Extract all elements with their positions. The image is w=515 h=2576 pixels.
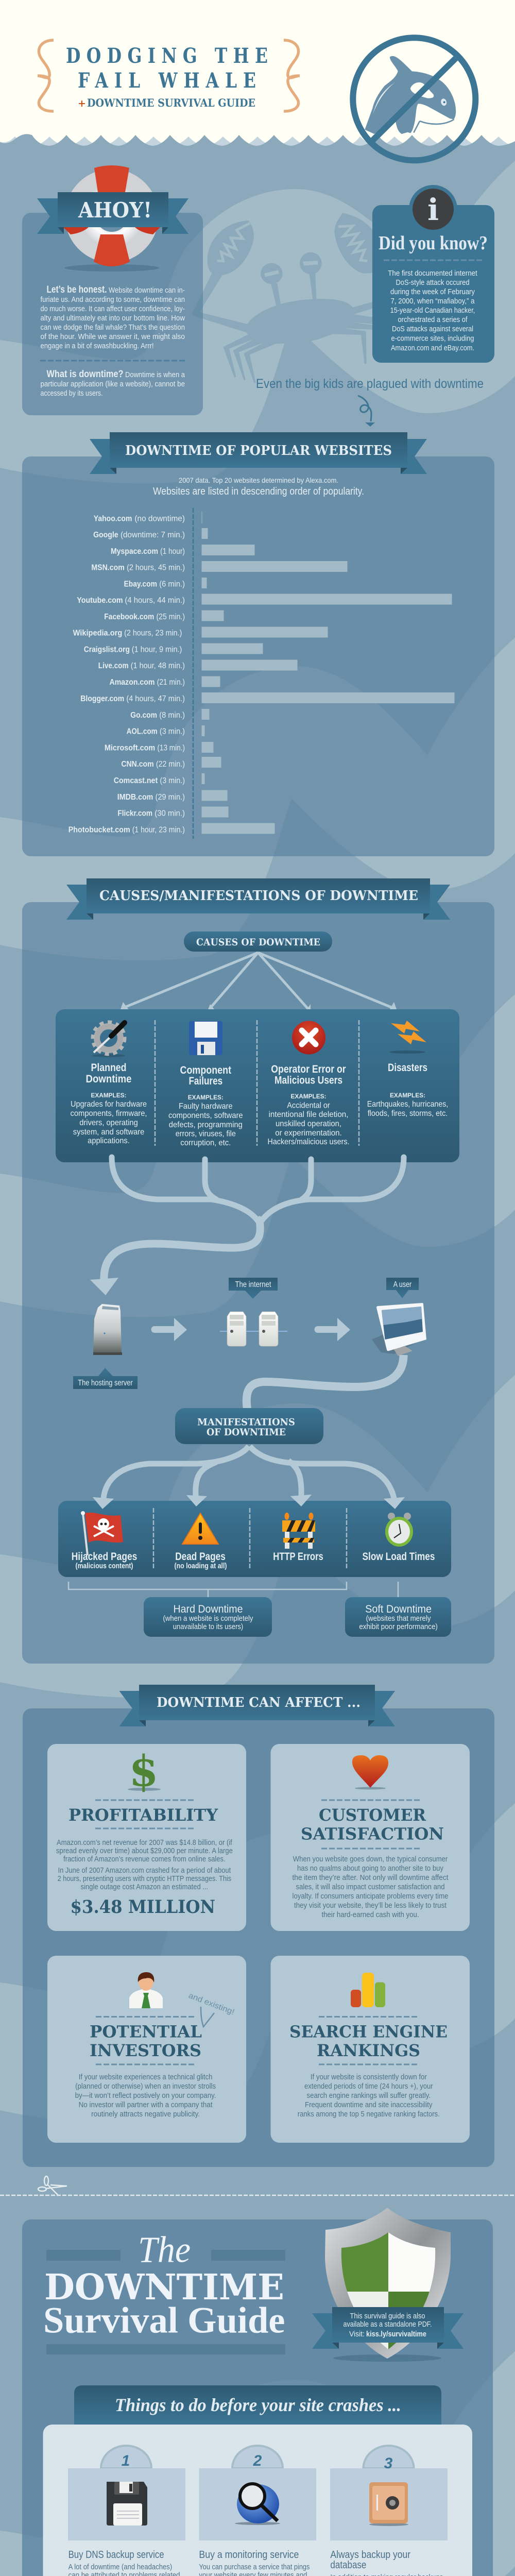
row: amazon: Amazon.com <box>109 678 154 687</box>
text: rankings: ranks among the top 5 negative ranking factors. <box>298 2110 440 2119</box>
icon: lightning <box>389 1021 426 1054</box>
box: hard downtime <box>144 1597 272 1637</box>
row: cnn: CNN.com <box>121 760 154 769</box>
row: amazon <box>109 676 220 687</box>
column: disasters: Earthquakes, hurricanes, <box>367 1100 448 1109</box>
column: planned downtime: Planned <box>91 1062 127 1074</box>
row: yahoo <box>94 512 202 523</box>
text: investors: No investor will partner with a company that <box>79 2100 213 2109</box>
row: live: (1 hour, 48 min.) <box>131 662 185 670</box>
column: planned downtime: Downtime <box>85 1073 132 1085</box>
icon: monitor <box>372 1303 426 1356</box>
text: dos attack fact: during the week of February <box>390 287 475 296</box>
text: let's be honest: Website downtime can in- <box>109 286 185 295</box>
arrow: internet to user <box>314 1318 350 1341</box>
column: operator error: Operator Error or <box>271 1063 346 1075</box>
text: let's be honest: can we dodge the fail whale? That’s the question <box>40 323 185 332</box>
text: dos attack fact: DoS-style attack occured <box>396 278 470 287</box>
text: dos attack fact: DoS attacks against several <box>392 325 473 333</box>
heading: customer satisfaction: CUSTOMER <box>319 1805 426 1825</box>
step 2: buy monitoring: 2 <box>253 2452 262 2469</box>
panel: did you know <box>372 185 494 363</box>
icon: dollar: $ <box>129 1747 159 1796</box>
text: amazon outage: 2 hours, presenting users with cryptic HTTP messages. This <box>58 1874 231 1883</box>
wave scallops <box>0 134 515 147</box>
step 3: always backup: database <box>330 2560 366 2571</box>
box: soft downtime: exhibit poor performance) <box>359 1622 438 1631</box>
panel: four manifestations <box>58 1495 451 1577</box>
text: what is downtime: What is downtime? <box>46 369 124 380</box>
text: let's be honest: of the hour. While we answer it, we might also <box>40 332 185 341</box>
row: youtube <box>77 594 452 605</box>
text: let's be honest: Let’s be honest. <box>46 284 107 295</box>
ribbon: ahoy <box>37 192 188 234</box>
box: soft downtime: Soft Downtime <box>365 1603 432 1615</box>
step 1: buy dns backup: A lot of downtime (and headaches) <box>68 2563 172 2571</box>
text: dos attack fact: orchestrated a series of <box>398 315 468 324</box>
column: planned downtime: system, and software <box>73 1128 144 1137</box>
text: let's be honest: alty and ultimately eat into our bottom line. How <box>40 314 185 323</box>
column: component failures: Faulty hardware <box>179 1102 233 1111</box>
column: planned downtime: applications. <box>88 1137 130 1145</box>
icon: blue floppy <box>189 1021 222 1055</box>
row: photobucket: (1 hour, 23 min.) <box>132 825 185 835</box>
icon: investor <box>129 1972 163 2008</box>
row: comcast: Comcast.net <box>114 776 158 785</box>
row: msn: (2 hours, 45 min.) <box>127 564 185 572</box>
heading: Did you know? <box>379 232 488 254</box>
row: facebook <box>104 610 224 621</box>
text: what is downtime: Downtime is when a <box>125 370 185 379</box>
row: yahoo: (no downtime) <box>134 514 185 523</box>
column: operator error: or experimentation. <box>275 1129 342 1138</box>
callout: big kids: Even the big kids are plagued with downtime <box>256 377 484 391</box>
text: rankings: If your website is consistently down for <box>311 2073 427 2081</box>
column: operator error: unskilled operation, <box>276 1120 341 1128</box>
icon: bars <box>351 1973 385 2007</box>
pill: manifestations of downtime: MANIFESTATIONS <box>197 1417 295 1428</box>
row: myspace: Myspace.com <box>111 547 158 556</box>
row: google: Google <box>93 531 118 539</box>
card: search engine rankings <box>271 1956 470 2143</box>
column: component failures: EXAMPLES: <box>188 1094 224 1101</box>
row: wikipedia <box>73 626 328 638</box>
heading: customer satisfaction <box>301 1805 444 1843</box>
step 2: buy monitoring: You can purchase a service that pings <box>199 2563 310 2571</box>
icon: internet servers <box>220 1312 287 1346</box>
subtitle: + <box>78 98 86 109</box>
text: consumers: loyalty. If consumers anticipate problems every time <box>293 1892 448 1901</box>
icon: scissors <box>38 2176 67 2195</box>
label: hijacked pages: Hijacked Pages <box>72 1551 137 1563</box>
label: a user <box>386 1278 419 1298</box>
row: go <box>130 709 209 720</box>
step 3: always backup: 3 <box>384 2455 393 2472</box>
pill: manifestations of downtime <box>175 1408 323 1444</box>
panel: downtime can affect <box>23 1708 494 2167</box>
text: what is downtime: accessed by its users. <box>40 389 103 398</box>
column: operator error: Malicious Users <box>274 1075 342 1086</box>
ribbon: pdf note: kiss.ly/survivaltime <box>366 2330 426 2338</box>
row: comcast <box>114 773 205 785</box>
box: soft downtime: (websites that merely <box>366 1614 431 1623</box>
text: dos attack fact: Amazon.com and eBay.com. <box>391 344 474 352</box>
column: planned downtime: Upgrades for hardware <box>71 1100 147 1109</box>
column: operator error: Accidental or <box>287 1101 330 1110</box>
panel: survival guide <box>22 2219 493 2576</box>
text: investors: routinely attracts negative publicity. <box>91 2110 200 2119</box>
column: planned downtime <box>70 1062 147 1145</box>
row: cnn <box>121 757 221 769</box>
label: the internet <box>229 1278 278 1299</box>
text: let's be honest <box>40 284 185 350</box>
row: craigslist <box>84 643 263 654</box>
row: cnn: (22 min.) <box>156 760 185 769</box>
text: rankings: extended periods of time (24 hours +), your <box>304 2082 433 2091</box>
title <box>38 40 300 111</box>
column: operator error <box>268 1063 349 1146</box>
column: disasters: floods, fires, storms, etc. <box>368 1109 448 1118</box>
page header background <box>0 0 515 155</box>
text: let's be honest: engage in a bit of swashbuckling. Arrr! <box>40 342 153 350</box>
box: hard downtime: Hard Downtime <box>173 1603 243 1615</box>
bar chart: downtime by website <box>68 508 454 839</box>
row: flickr: (30 min.) <box>154 809 185 818</box>
icon: hosting server tower <box>93 1304 122 1355</box>
row: wikipedia: (2 hours, 23 min.) <box>124 629 182 638</box>
title line one: DODGING THE <box>66 44 268 68</box>
row: wikipedia: Wikipedia.org <box>73 629 122 638</box>
column: disasters: EXAMPLES: <box>390 1092 425 1099</box>
text: dos attack fact: 7, 2000, when “mafiaboy,” a <box>390 297 475 306</box>
text: amazon outage: Amazon.com’s net revenue for 2007 was $14.8 billion, or (if <box>57 1838 232 1847</box>
panel: downtime of popular websites <box>22 456 494 856</box>
note: and existing <box>187 1991 235 2027</box>
icon: pirate flag <box>81 1511 123 1555</box>
step 1: buy dns backup: Buy DNS backup service <box>68 2549 164 2561</box>
stat: cost: $3.48 MILLION <box>70 1896 215 1918</box>
note: and existing: and existing! <box>187 1991 235 2016</box>
title: the downtime survival guide: Survival Guide <box>43 2300 285 2341</box>
row: aol: AOL.com <box>127 727 158 736</box>
text: what is downtime: particular application (like a website), cannot be <box>40 380 185 388</box>
label: http errors: HTTP Errors <box>273 1551 323 1563</box>
row: aol <box>127 725 205 736</box>
whale <box>365 56 456 134</box>
row: microsoft <box>105 742 213 753</box>
row: blogger: Blogger.com <box>80 694 124 703</box>
icon: magnifier on globe <box>235 2484 280 2525</box>
step 2: buy monitoring <box>199 2446 316 2576</box>
right brace <box>284 40 300 111</box>
text: consumers: When you website goes down, the typical consumer <box>293 1855 448 1863</box>
banner: downtime can affect <box>119 1685 395 1726</box>
text: what is downtime <box>40 369 185 398</box>
box: hard downtime: unavailable to its users) <box>173 1622 243 1631</box>
subtitle: DOWNTIME SURVIVAL GUIDE <box>87 96 255 109</box>
step 3: always backup: Always backup your <box>330 2549 410 2561</box>
text: dos attack fact <box>388 269 477 352</box>
pill: manifestations of downtime: OF DOWNTIME <box>207 1427 286 1438</box>
banner: downtime can affect: DOWNTIME CAN AFFECT ... <box>157 1695 360 1710</box>
label: slow load times: Slow Load Times <box>363 1551 435 1563</box>
label: the internet: The internet <box>235 1280 271 1289</box>
row: microsoft: (13 min.) <box>157 744 185 752</box>
heading: potential investors: INVESTORS <box>90 2041 201 2060</box>
text: dos attack fact: e-commerce sites, including <box>391 334 474 343</box>
row: flickr: Flickr.com <box>117 809 152 818</box>
row: imdb: (29 min.) <box>156 793 185 802</box>
title line two: FAIL WHALE <box>78 69 256 93</box>
label: hijacked pages <box>72 1551 137 1570</box>
text: rankings: Frequent downtime and site inaccessibility <box>305 2100 433 2109</box>
text: rankings: search engine rankings will suffer greatly. <box>307 2091 431 2100</box>
text: dos attack fact: The first documented internet <box>388 269 477 278</box>
step 1: buy dns backup: 1 <box>122 2452 130 2469</box>
ribbon: pdf note: available as a standalone PDF. <box>343 2320 432 2329</box>
row: blogger <box>80 692 455 703</box>
text: amazon outage: spread evenly over time) about $29,000 per minute. A large <box>56 1846 233 1855</box>
icon: lifebuoy <box>63 165 160 272</box>
text: amazon outage: fraction of Amazon’s revenue comes from online sales. <box>63 1855 226 1863</box>
row: photobucket <box>68 823 274 835</box>
panel: ahoy <box>22 165 203 415</box>
bracket: hard and soft downtime <box>68 1582 398 1597</box>
row: craigslist: Craigslist.org <box>84 645 130 654</box>
row: msn <box>91 561 347 572</box>
arrows: causes to categories <box>119 953 398 1014</box>
icon: info <box>413 189 454 230</box>
left brace <box>38 40 54 111</box>
text: investors: (planned or otherwise) when an investor strolls <box>75 2082 216 2091</box>
row: google <box>93 528 208 539</box>
text: investors: If your website experiences a technical glitch <box>79 2073 212 2081</box>
label: hosting server: The hosting server <box>78 1379 133 1387</box>
row: live: Live.com <box>98 662 129 670</box>
pill: causes of downtime <box>184 931 332 952</box>
row: youtube: Youtube.com <box>77 596 123 605</box>
row: ebay: Ebay.com <box>124 580 157 588</box>
text: consumers: the item they’re after. Not only will downtime affect <box>293 1873 449 1882</box>
column: component failures: errors, viruses, file <box>176 1129 236 1139</box>
text: amazon outage <box>56 1838 233 1891</box>
ribbon: pdf note <box>312 2307 464 2349</box>
text: consumers: their hard-earned cash with you. <box>321 1910 419 1919</box>
step 1: buy dns backup <box>68 2446 185 2576</box>
text: amazon outage: In June of 2007 Amazon.com crashed for a period of about <box>58 1866 231 1875</box>
chart note: Websites are listed in descending order of popularity. <box>153 486 364 497</box>
column: component failures <box>168 1064 243 1147</box>
row: craigslist: (1 hour, 9 min.) <box>132 645 182 654</box>
text: consumers <box>293 1855 449 1919</box>
row: microsoft: Microsoft.com <box>105 744 155 752</box>
text: let's be honest: do much worse. It can affect user confidence, loy- <box>40 304 185 313</box>
row: myspace <box>111 545 254 556</box>
icon: error <box>292 1021 325 1054</box>
panel: four causes <box>56 1009 459 1162</box>
text: consumers: sales, it will also impact customer satisfaction and <box>296 1883 445 1891</box>
row: imdb: IMDB.com <box>117 793 153 802</box>
heading: potential investors: POTENTIAL <box>90 2022 202 2041</box>
column: planned downtime: EXAMPLES: <box>91 1092 127 1099</box>
row: ebay: (6 min.) <box>159 580 185 588</box>
row: facebook: Facebook.com <box>104 613 154 621</box>
tab: things to do before <box>74 2385 441 2425</box>
row: imdb <box>117 790 228 802</box>
pill: causes of downtime: CAUSES OF DOWNTIME <box>196 937 320 948</box>
text: investors <box>75 2073 216 2119</box>
card: customer satisfaction <box>271 1744 470 1931</box>
title: the downtime survival guide: The <box>138 2229 191 2270</box>
label: a user: A user <box>393 1280 412 1289</box>
column: operator error: EXAMPLES: <box>290 1093 327 1100</box>
row: aol: (3 min.) <box>160 727 185 736</box>
column: operator error: intentional file deletion, <box>269 1110 348 1119</box>
connector: user to manifestations <box>247 1355 404 1409</box>
row: ebay <box>124 578 207 588</box>
label: hijacked pages: (malicious content) <box>75 1562 133 1570</box>
heading: search engine rankings: SEARCH ENGINE <box>289 2022 448 2041</box>
row: go: (8 min.) <box>159 711 185 720</box>
banner: downtime of popular websites <box>90 432 427 474</box>
text: let's be honest: furiate us. And according to some, downtime can <box>40 295 185 304</box>
row: live <box>98 659 298 671</box>
heading: potential investors <box>90 2022 202 2060</box>
icon: alarm clock <box>385 1513 413 1547</box>
prohibition slash <box>372 58 456 141</box>
connector: manifestations branches <box>93 1446 405 1509</box>
connector: causes merge into server <box>90 1157 404 1295</box>
label: dead pages <box>174 1551 227 1570</box>
row: go: Go.com <box>130 711 157 720</box>
row: blogger: (4 hours, 47 min.) <box>126 694 185 703</box>
heading: search engine rankings: RANKINGS <box>317 2041 420 2060</box>
heading: search engine rankings <box>289 2022 448 2060</box>
row: comcast: (3 min.) <box>160 776 185 785</box>
row: google: (downtime: 7 min.) <box>121 531 185 539</box>
text: consumers: has no qualms about going to another site to buy <box>297 1864 443 1873</box>
banner: causes and manifestations <box>66 878 450 920</box>
row: yahoo: Yahoo.com <box>94 514 132 523</box>
ribbon: pdf note: This survival guide is also <box>350 2312 425 2320</box>
card: profitability <box>47 1744 246 1931</box>
ribbon: pdf note: Visit: <box>349 2330 365 2338</box>
column: planned downtime: components, firmware, <box>70 1109 147 1118</box>
icon: warning triangle <box>182 1513 218 1544</box>
icon: heart <box>352 1755 388 1790</box>
column: planned downtime: drivers, operating <box>79 1118 138 1127</box>
icon: gear and screwdriver <box>92 1022 125 1057</box>
icon: no fail whale sign <box>353 38 475 160</box>
text: investors: by—it won’t reflect postively on your company. <box>75 2091 216 2100</box>
text: dos attack fact: 15-year-old Canadian hacker, <box>390 306 475 315</box>
row: msn: MSN.com <box>91 564 125 572</box>
label: hosting server <box>73 1368 138 1389</box>
column: component failures: Component <box>180 1064 231 1076</box>
row: facebook: (25 min.) <box>157 613 185 621</box>
panel: before list <box>43 2425 472 2576</box>
banner: causes and manifestations: CAUSES/MANIFESTATIONS OF DOWNTIME <box>99 888 418 904</box>
column: component failures: corruption, etc. <box>180 1139 231 1147</box>
label: dead pages: Dead Pages <box>175 1551 226 1563</box>
text: amazon outage: single outage cost Amazon an estimated ... <box>81 1883 208 1891</box>
box: soft downtime <box>345 1597 451 1637</box>
column: component failures: defects, programming <box>169 1121 243 1129</box>
label: dead pages: (no loading at all) <box>174 1562 227 1570</box>
column: disasters: Disasters <box>388 1062 427 1074</box>
heading: profitability: PROFITABILITY <box>68 1805 218 1825</box>
column: component failures: Failures <box>188 1075 222 1087</box>
chart note <box>153 476 364 497</box>
row: flickr <box>117 807 229 818</box>
title: the downtime survival guide <box>43 2229 285 2354</box>
prohibition ring <box>353 38 475 160</box>
arrow: squiggle down <box>358 396 375 427</box>
icon: road barrier <box>282 1513 315 1549</box>
icon: floppy <box>107 2482 147 2526</box>
text: consumers: they visit your website, they’ll be less likely to trust <box>294 1901 447 1910</box>
title: the downtime survival guide: DOWNTIME <box>44 2267 284 2308</box>
row: myspace: (1 hour) <box>160 547 185 556</box>
ribbon: ahoy: AHOY! <box>78 198 152 223</box>
column: component failures: components, software <box>168 1111 243 1120</box>
text: rankings <box>298 2073 440 2119</box>
chart note: 2007 data. Top 20 websites determined by Alexa.com. <box>179 476 338 484</box>
crab silhouette: background <box>192 213 376 383</box>
card: potential investors <box>47 1956 246 2143</box>
heading: customer satisfaction: SATISFACTION <box>301 1824 444 1843</box>
panel: causes and manifestations <box>22 902 494 1664</box>
icon: safe <box>369 2482 408 2526</box>
tab: things to do before: Things to do before your site crashes ... <box>115 2395 401 2415</box>
row: photobucket: Photobucket.com <box>68 825 130 835</box>
column: disasters <box>367 1062 448 1118</box>
column: operator error: Hackers/malicious users. <box>268 1138 349 1146</box>
step 2: buy monitoring: Buy a monitoring service <box>199 2549 299 2561</box>
step 3: always backup <box>330 2446 448 2576</box>
icon: info: i <box>427 192 439 227</box>
arrow: server to internet <box>151 1318 187 1341</box>
box: hard downtime: (when a website is completely <box>163 1614 253 1623</box>
row: amazon: (21 min.) <box>157 678 185 687</box>
banner: downtime of popular websites: DOWNTIME OF POPULAR WEBSITES <box>125 443 392 459</box>
row: youtube: (4 hours, 44 min.) <box>125 596 185 605</box>
icon: shield <box>325 2208 451 2362</box>
